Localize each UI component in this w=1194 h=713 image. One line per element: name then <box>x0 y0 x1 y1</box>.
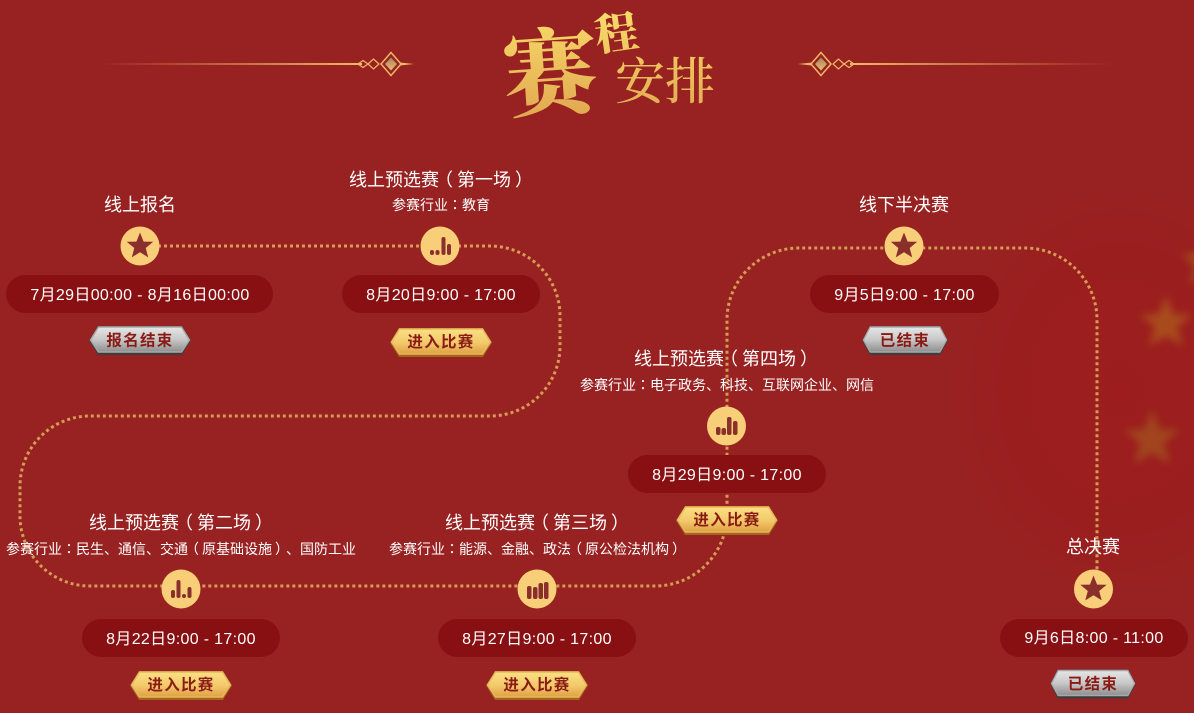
subheading: 参赛行业：能源、金融、政法（原公检法机构） <box>389 539 686 559</box>
title ornament left <box>100 52 414 76</box>
button: enter: 进入比赛 <box>407 332 475 351</box>
icon: star <box>120 226 160 266</box>
title: 安排 <box>615 42 715 114</box>
stage: offline semi-final <box>810 195 999 355</box>
date pill <box>82 619 280 657</box>
title: 赛 <box>498 0 611 137</box>
subheading: 参赛行业：电子政务、科技、互联网企业、网信 <box>580 375 874 395</box>
icon: star <box>884 226 924 266</box>
icon: bars <box>707 406 746 446</box>
icon: bars <box>518 570 556 608</box>
title ornament right <box>798 52 1112 76</box>
button: enter <box>676 506 778 535</box>
button: ended: 已结束 <box>1068 675 1118 693</box>
button: enter: 进入比赛 <box>503 675 571 694</box>
button: ended <box>1050 670 1136 698</box>
date pill: 8月29日9:00 - 17:00 <box>652 467 802 484</box>
decorative star <box>1140 295 1192 346</box>
heading: 总决赛 <box>1066 537 1120 557</box>
button: ended <box>862 326 948 355</box>
subheading: 参赛行业：民生、通信、交通（原基础设施）、国防工业 <box>6 539 356 559</box>
button: enter: 进入比赛 <box>693 510 761 529</box>
date pill: 7月29日00:00 - 8月16日00:00 <box>30 287 250 304</box>
date pill: 8月27日9:00 - 17:00 <box>462 631 612 648</box>
date pill <box>438 619 636 657</box>
icon: bars <box>162 570 200 608</box>
heading: 线上预选赛（第三场） <box>445 513 629 533</box>
button: enter <box>130 671 232 700</box>
button: enter <box>390 328 492 357</box>
button: registration closed <box>89 326 191 355</box>
heading: 线上报名 <box>104 195 176 215</box>
stage: preliminary round 4 <box>580 349 874 535</box>
date pill: 8月22日9:00 - 17:00 <box>106 631 256 648</box>
date pill <box>342 275 540 313</box>
stage: final <box>1000 537 1188 698</box>
heading: 线上预选赛（第二场） <box>89 513 273 533</box>
button: ended: 已结束 <box>880 332 930 350</box>
subheading: 参赛行业：教育 <box>392 195 490 215</box>
stage: preliminary round 2 <box>6 513 356 700</box>
date pill <box>1000 619 1188 657</box>
icon: star <box>1074 570 1113 608</box>
icon: bars <box>420 226 460 266</box>
dotted route line <box>20 246 1097 590</box>
stage: preliminary round 1 <box>342 170 540 357</box>
button: registration closed: 报名结束 <box>106 330 174 350</box>
title <box>498 0 715 137</box>
button: enter: 进入比赛 <box>147 675 215 694</box>
heading: 线上预选赛（第一场） <box>349 170 533 190</box>
date pill <box>810 275 999 313</box>
stage: online registration <box>6 195 273 355</box>
date pill <box>628 455 826 493</box>
date pill <box>6 275 273 313</box>
heading: 线上预选赛（第四场） <box>634 349 818 369</box>
date pill: 9月6日8:00 - 11:00 <box>1024 630 1164 647</box>
date pill: 9月5日9:00 - 17:00 <box>834 287 975 304</box>
date pill: 8月20日9:00 - 17:00 <box>366 287 516 304</box>
stage: preliminary round 3 <box>389 513 686 700</box>
button: enter <box>486 671 588 700</box>
heading: 线下半决赛 <box>859 195 949 215</box>
